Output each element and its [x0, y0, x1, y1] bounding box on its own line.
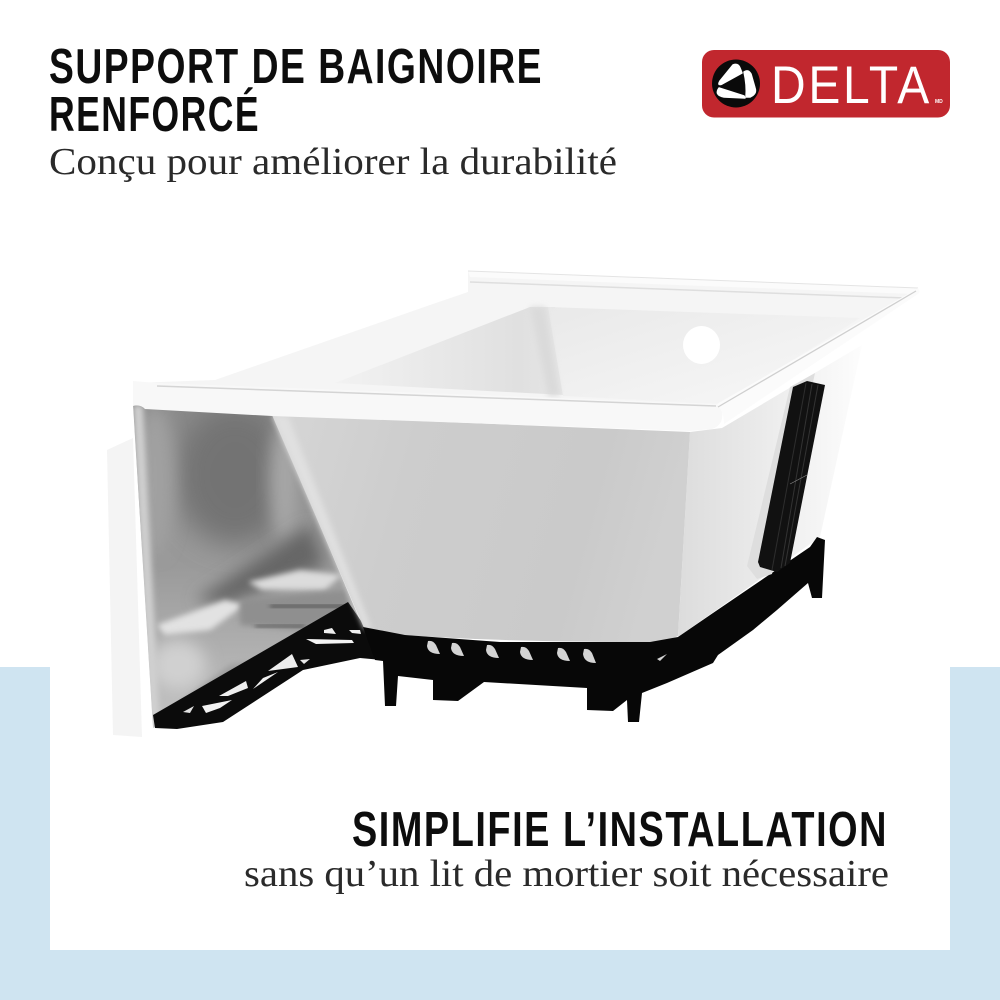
black overflow grate	[758, 381, 825, 572]
white inset panel	[50, 667, 950, 950]
logo: Delta: MD	[935, 99, 943, 105]
front rim	[133, 381, 722, 431]
left arm of support frame	[153, 602, 382, 729]
background band: light blue	[0, 667, 1000, 1000]
left inner wall	[133, 405, 365, 730]
logo: Delta: DELTA	[771, 56, 932, 115]
logo: Delta	[702, 50, 950, 118]
bowl interior	[335, 307, 565, 395]
left apron strip	[107, 438, 142, 737]
drain hole	[683, 326, 720, 364]
title: RENFORCÉ	[49, 88, 260, 142]
right side face	[678, 345, 862, 637]
title	[49, 40, 543, 142]
right rim	[717, 288, 920, 424]
illustration: bathtub with reinforced support	[107, 271, 920, 737]
front and right support frame	[363, 537, 825, 722]
title: SUPPORT DE BAIGNOIRE	[49, 40, 543, 94]
overflow grate shadow panel	[747, 373, 815, 579]
frame perforations	[427, 641, 667, 663]
subtitle: Conçu pour améliorer la durabilité	[49, 141, 617, 183]
bowl front face	[272, 415, 690, 642]
bottom subheading: sans qu’un lit de mortier soit nécessaire	[244, 853, 889, 895]
outer deck	[133, 271, 918, 405]
